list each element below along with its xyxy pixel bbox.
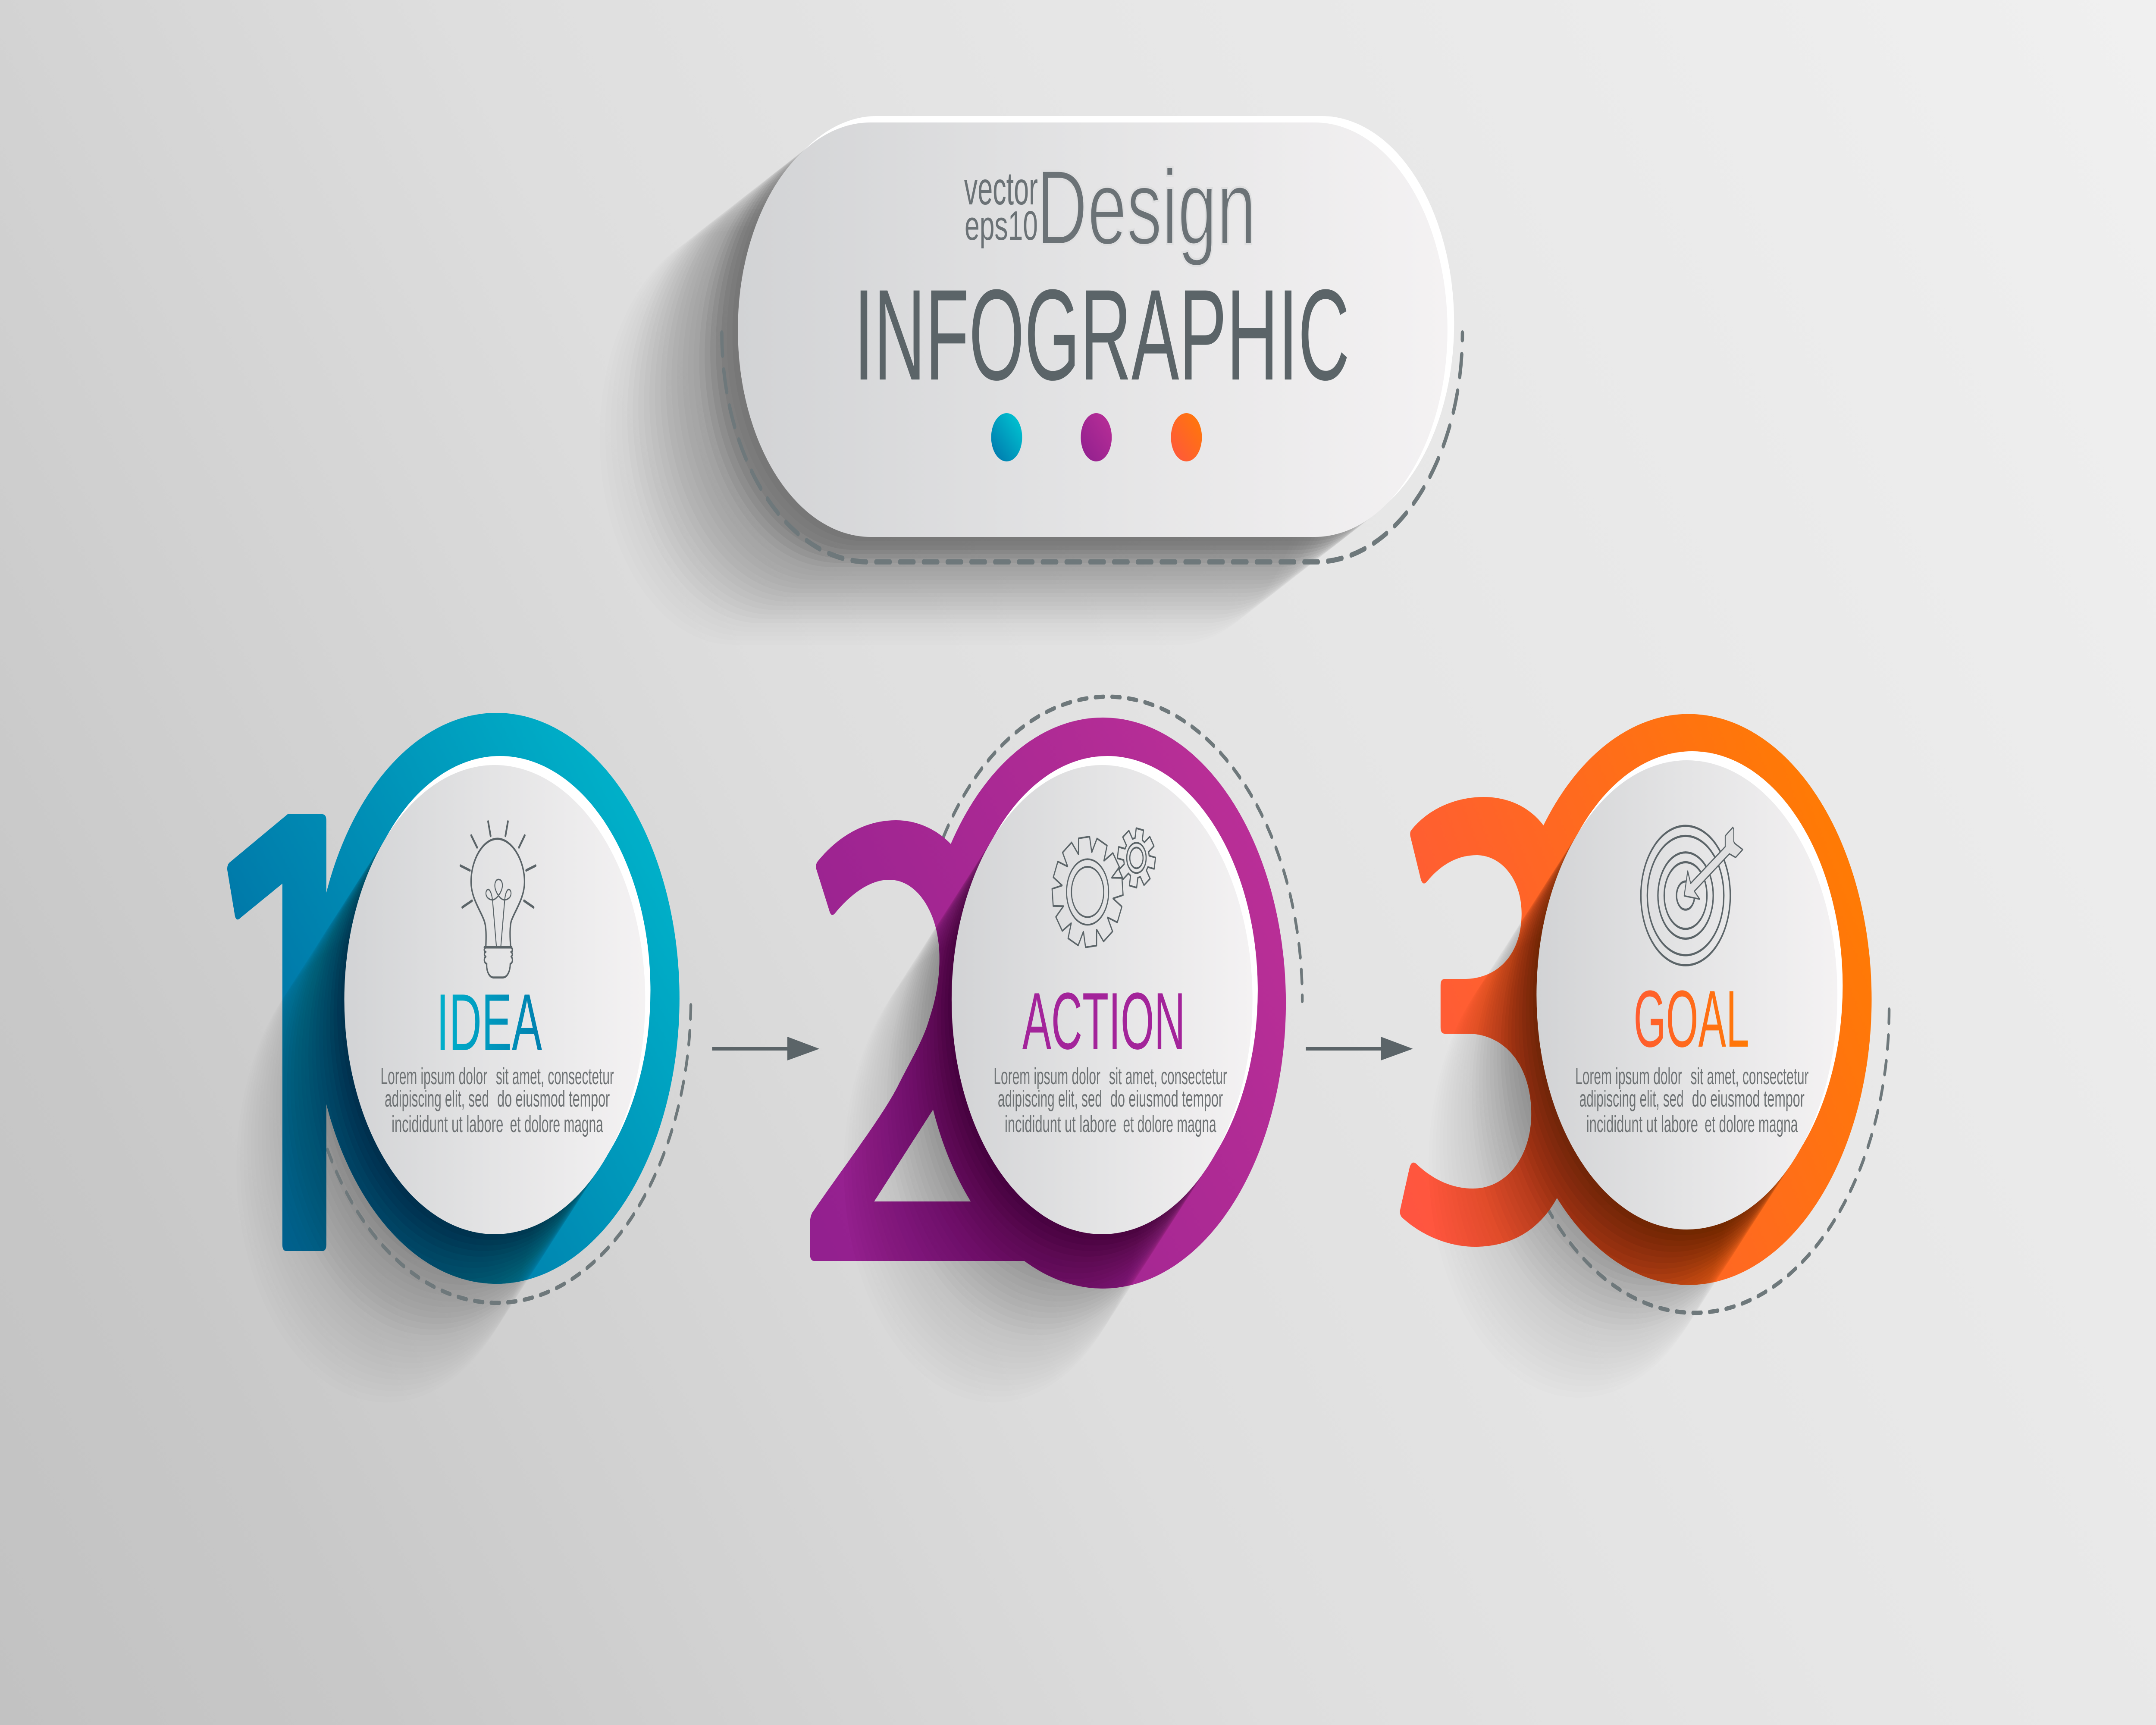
long shadow on numeral and ring <box>855 840 1205 1289</box>
panel: step 2 action <box>810 696 1302 1402</box>
long shadow on numeral and ring <box>282 840 598 1284</box>
text block: goal description <box>1575 1063 1808 1137</box>
text block: idea description: sit amet, consectetur <box>496 1063 614 1089</box>
disc face <box>1536 760 1837 1229</box>
text block: goal description: sit amet, consectetur <box>1691 1063 1808 1089</box>
pill dashed outline <box>722 333 1462 562</box>
text block: action description: Lorem ipsum dolor <box>993 1063 1100 1089</box>
dot: purple <box>1081 413 1112 461</box>
panel: step 1 idea <box>227 713 691 1402</box>
heading: Design: Design <box>1037 147 1256 267</box>
disc white edge <box>957 756 1258 1225</box>
dashed arc <box>1549 1010 1889 1313</box>
text block: goal description: adipiscing elit, sed <box>1579 1085 1684 1112</box>
heading: IDEA: IDEA <box>436 978 542 1067</box>
heading: ACTION: ACTION <box>1022 976 1185 1066</box>
dashed arc <box>327 1005 691 1303</box>
text block: idea description: adipiscing elit, sed <box>385 1085 489 1112</box>
ring disc <box>313 713 680 1284</box>
text block: idea description: Lorem ipsum dolor <box>381 1063 487 1089</box>
dot: orange <box>1171 413 1202 461</box>
icon: gears <box>1049 824 1158 952</box>
shadow on background <box>236 771 642 1402</box>
numeral 3 with ring <box>1400 714 1872 1285</box>
disc white edge <box>350 756 650 1225</box>
text block: idea description: incididunt ut labore <box>392 1111 503 1137</box>
text block: goal description: et dolore magna <box>1705 1111 1798 1137</box>
text block: idea description: et dolore magna <box>510 1111 603 1137</box>
dashed arc <box>943 696 1302 1001</box>
text block: action description: incididunt ut labore <box>1005 1111 1116 1137</box>
small label: vector: vector <box>964 163 1038 215</box>
numeral 1 <box>227 814 326 1251</box>
text block: action description: do eiusmod tempor <box>1110 1085 1223 1112</box>
disc white edge <box>1542 751 1843 1220</box>
panel: step 3 goal <box>1400 714 1889 1398</box>
heading: GOAL: GOAL <box>1633 974 1749 1064</box>
text block: goal description: do eiusmod tempor <box>1692 1085 1805 1112</box>
pill white edge <box>745 116 1454 530</box>
pill face <box>738 122 1448 537</box>
text block: idea description: do eiusmod tempor <box>497 1085 610 1112</box>
panel: title pill <box>599 116 1462 645</box>
icon: light bulb <box>461 822 536 978</box>
title: INFOGRAPHIC: INFOGRAPHIC <box>854 263 1350 407</box>
shadow on background <box>844 771 1249 1402</box>
small label: eps10: eps10 <box>965 203 1038 249</box>
disc face <box>952 765 1253 1234</box>
arrow: idea to action <box>712 1037 819 1060</box>
long shadow on numeral and ring <box>1429 766 1834 1398</box>
text block: action description: sit amet, consectetur <box>1109 1063 1227 1089</box>
shadow on background <box>1429 766 1834 1398</box>
text block: action description <box>993 1063 1227 1137</box>
pill long shadow <box>599 127 1442 645</box>
disc face <box>344 765 645 1234</box>
icon: target with arrow <box>1641 826 1743 965</box>
text block: idea description <box>381 1063 614 1137</box>
arrow: action to goal <box>1306 1037 1413 1060</box>
numeral 2 with ring <box>810 718 1286 1289</box>
text block: goal description: Lorem ipsum dolor <box>1575 1063 1682 1089</box>
text block: action description: et dolore magna <box>1123 1111 1216 1137</box>
text block: action description: adipiscing elit, sed <box>998 1085 1102 1112</box>
text block: goal description: incididunt ut labore <box>1586 1111 1698 1137</box>
dot: blue <box>991 413 1022 461</box>
